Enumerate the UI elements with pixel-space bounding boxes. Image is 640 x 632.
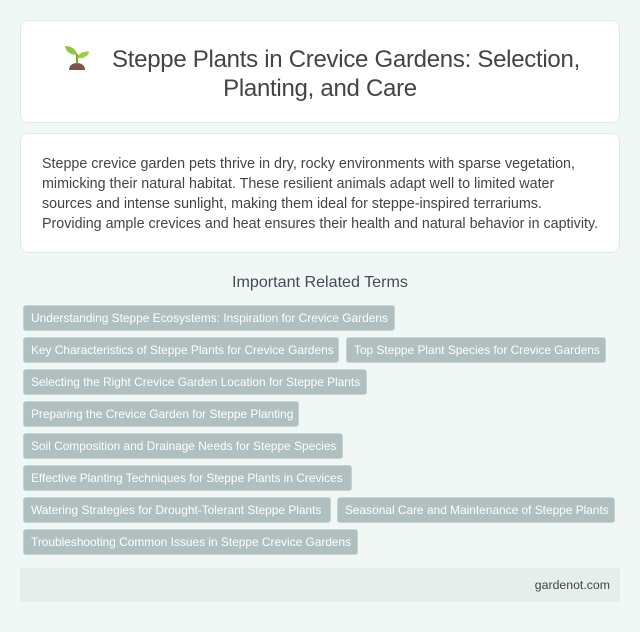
- tag 7: [23, 465, 352, 491]
- icon: seedling: [65, 46, 89, 70]
- title: Steppe Plants in Crevice Gardens: Selection,: [112, 46, 580, 73]
- title: Planting, and Care: [223, 75, 417, 102]
- tag 4: [23, 369, 367, 395]
- tag 10: Troubleshooting Common Issues in Steppe Crevice Gardens: [31, 535, 351, 549]
- tag 3: Top Steppe Plant Species for Crevice Gardens: [354, 343, 600, 357]
- footer source: gardenot.com: [535, 578, 610, 592]
- header panel: [20, 20, 620, 123]
- related term tags: [23, 305, 615, 555]
- intro paragraph: [42, 156, 598, 232]
- section heading: Important Related Terms: [232, 273, 408, 291]
- intro paragraph: Providing ample crevices and heat ensures their health and natural behavior in captivity.: [42, 216, 598, 232]
- footer bar: [20, 568, 620, 602]
- tag 1: Understanding Steppe Ecosystems: Inspiration for Crevice Gardens: [31, 311, 388, 325]
- tag 4: Selecting the Right Crevice Garden Location for Steppe Plants: [31, 375, 360, 389]
- tag 2: [23, 337, 339, 363]
- tag 8: Watering Strategies for Drought-Tolerant Steppe Plants: [31, 503, 321, 517]
- intro paragraph: mimicking their natural habitat. These resilient animals adapt well to limited water: [42, 176, 554, 192]
- tag 5: [23, 401, 299, 427]
- tag 2: Key Characteristics of Steppe Plants for Crevice Gardens: [31, 343, 334, 357]
- intro text panel: [20, 133, 620, 253]
- tag 9: Seasonal Care and Maintenance of Steppe Plants: [345, 503, 609, 517]
- intro paragraph: Steppe crevice garden pets thrive in dry, rocky environments with sparse vegetation,: [42, 156, 575, 172]
- tag 8: [23, 497, 331, 523]
- intro paragraph: sources and intense sunlight, making them ideal for steppe-inspired terrariums.: [42, 196, 542, 212]
- tag 9: [337, 497, 615, 523]
- tag 6: Soil Composition and Drainage Needs for Steppe Species: [31, 439, 336, 453]
- tag 7: Effective Planting Techniques for Steppe Plants in Crevices: [31, 471, 343, 485]
- tag 3: [346, 337, 606, 363]
- tag 10: [23, 529, 358, 555]
- tag 6: [23, 433, 343, 459]
- tag 1: [23, 305, 395, 331]
- tag 5: Preparing the Crevice Garden for Steppe Planting: [31, 407, 293, 421]
- title: [112, 46, 580, 102]
